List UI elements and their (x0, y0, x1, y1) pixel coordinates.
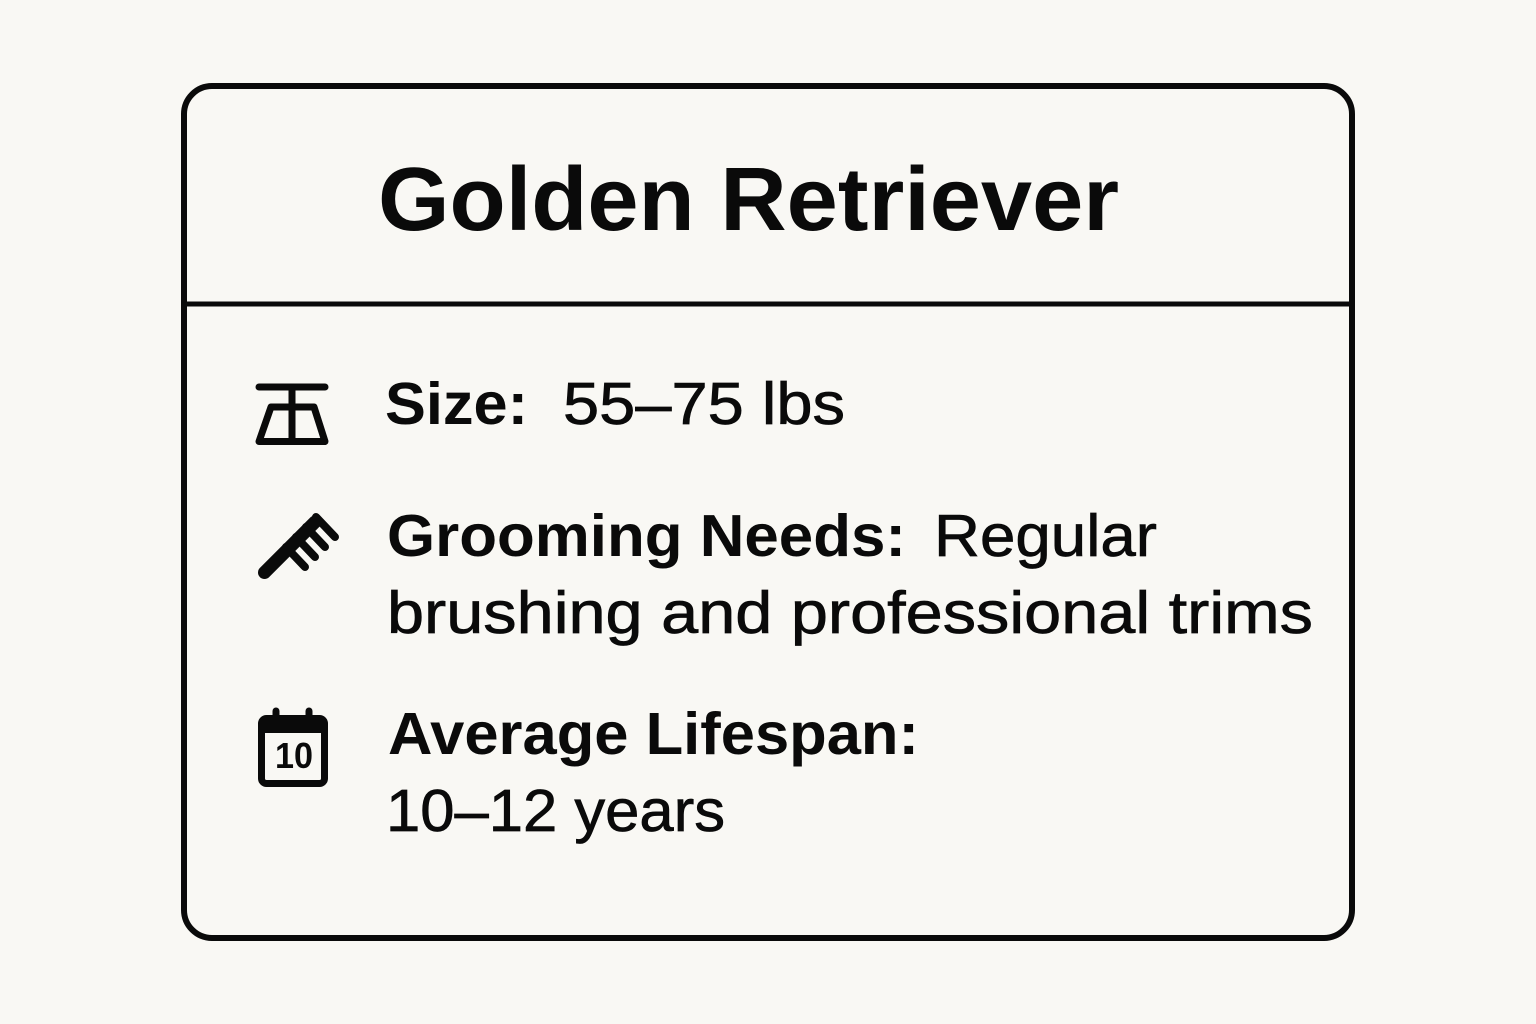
size row: 55–75 lbs (563, 371, 845, 437)
size row (385, 371, 845, 437)
average lifespan row: 10–12 years (386, 778, 725, 844)
icon: comb for grooming (264, 517, 335, 572)
panel: breed card (184, 86, 1352, 938)
average lifespan row (386, 701, 919, 844)
icon: table for size (259, 387, 325, 442)
grooming needs row: brushing and professional trims (387, 580, 1313, 646)
title: Golden Retriever (378, 150, 1119, 250)
grooming needs row (387, 503, 1313, 646)
average lifespan row: Average Lifespan: (388, 701, 919, 767)
icon: calendar for lifespan: 10 (275, 735, 313, 776)
grooming needs row: Grooming Needs: (387, 503, 906, 569)
size row: Size: (385, 371, 528, 437)
grooming needs row: Regular (934, 503, 1157, 569)
icon: calendar for lifespan (261, 711, 325, 784)
